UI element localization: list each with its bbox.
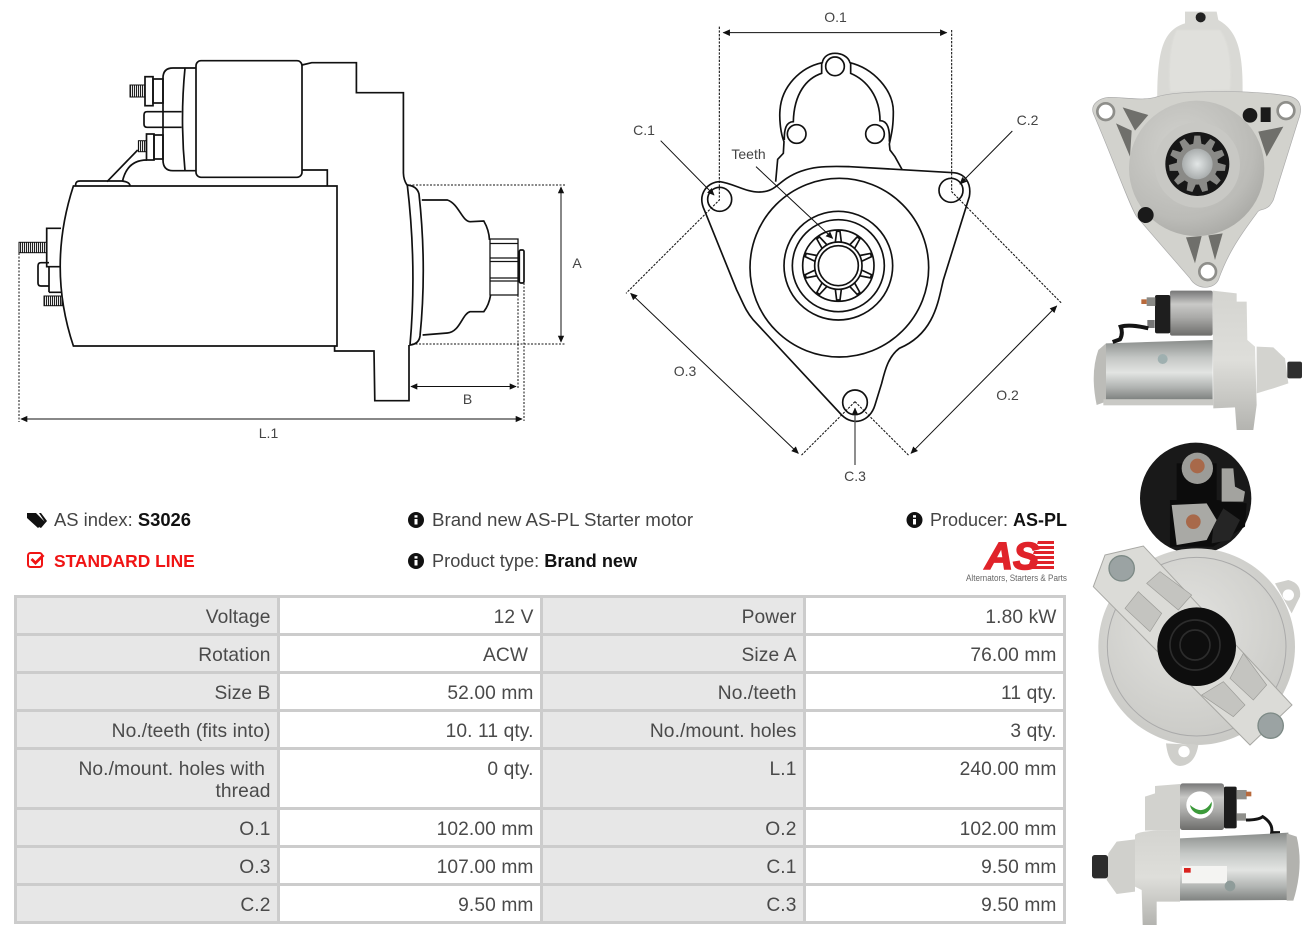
specification table: 9.50 mm [981, 895, 1056, 916]
specification table: Size B [214, 683, 270, 704]
icon: tags [27, 513, 47, 528]
specification table: O.2 [765, 819, 796, 840]
dimension B [411, 295, 518, 388]
logo stripes [1027, 541, 1054, 569]
solenoid [1180, 783, 1224, 830]
specification table: L.1 [770, 759, 796, 780]
specification table: C.1 [766, 857, 796, 878]
label B: B [463, 391, 472, 407]
dimension O.3 arrow [631, 293, 798, 453]
specification table: No./teeth [718, 683, 796, 704]
label O.3: O.3 [674, 363, 696, 379]
AS index: AS index: S3026 [54, 509, 191, 530]
specification table: 76.00 mm [970, 645, 1056, 666]
label Teeth: Teeth [731, 146, 766, 162]
specification table: Rotation [198, 645, 270, 666]
logo tagline: Alternators, Starters & Parts [966, 573, 1067, 583]
label O.1: O.1 [824, 9, 847, 25]
bracket recesses [1125, 572, 1267, 717]
icon: check box [28, 553, 44, 567]
specification table: 102.00 mm [960, 819, 1056, 840]
pinion teeth [805, 231, 872, 300]
motor cylinder [1106, 340, 1213, 399]
solenoid cover [1157, 12, 1243, 98]
end cap [1287, 833, 1300, 901]
housing disc [1098, 548, 1295, 745]
solenoid mount inner rim [784, 63, 889, 142]
specification table: O.1 [239, 819, 270, 840]
rear end bracket and bolts [19, 228, 62, 306]
specification table: No./mount. holes with [78, 759, 265, 780]
dotted construction lines [626, 27, 1062, 456]
pinion [1092, 855, 1108, 878]
side-view technical drawing of the starter motor [19, 61, 524, 401]
label L.1: L.1 [259, 425, 278, 441]
diagonal bracket [1093, 546, 1292, 745]
specification table: 11 qty. [1001, 683, 1056, 704]
specification table: 12 V [494, 607, 534, 628]
ear mounts [1166, 580, 1300, 766]
specification table: 0 qty. [487, 759, 534, 780]
specification table: 9.50 mm [458, 895, 534, 916]
lower terminal plate [1172, 503, 1217, 545]
specification table: thread [215, 781, 270, 802]
solenoid [1170, 291, 1213, 336]
motor cylinder [1180, 833, 1292, 901]
bolt [1158, 354, 1168, 364]
dimension O.2 arrow [911, 306, 1057, 453]
specification table: 10. 11 qty. [446, 721, 534, 742]
solenoid mount outline [776, 53, 902, 182]
nose [1257, 347, 1288, 393]
pinion tip [519, 250, 524, 283]
drive housing [1213, 291, 1257, 430]
connecting wires [107, 150, 147, 182]
dimension L.1 [19, 253, 524, 422]
photo: starter side view facing left [1092, 783, 1300, 925]
solenoid housing [196, 61, 302, 177]
standard line badge: STANDARD LINE [54, 551, 195, 571]
dimension A [409, 185, 566, 344]
solenoid black cap [1224, 787, 1237, 828]
logo letters: AS [984, 536, 1039, 578]
terminals and wire [1237, 790, 1280, 833]
specification table: 102.00 mm [437, 819, 534, 840]
lower terminal bolt [138, 134, 163, 160]
mounting holes on solenoid flange [787, 57, 884, 143]
icon: info (brand new) [408, 512, 424, 528]
icon: info (product type) [408, 553, 424, 569]
product type: Product type: Brand new [432, 551, 637, 571]
specification table: 107.00 mm [437, 857, 534, 878]
product description: Brand new AS-PL Starter motor [432, 509, 693, 530]
label O.2: O.2 [996, 387, 1019, 403]
terminals [1141, 297, 1155, 328]
terminal bracket on motor [76, 181, 130, 186]
specification table: Size A [742, 645, 796, 666]
C.2 pointer [960, 131, 1012, 184]
pinion [1165, 132, 1229, 196]
photo: starter rear view [1093, 443, 1300, 766]
motor body outline [60, 186, 337, 346]
mounting plate outline [702, 166, 970, 421]
icon: info (producer) [906, 512, 922, 528]
mounting holes C.1 C.2 C.3 [708, 178, 963, 415]
green sticker [1186, 791, 1214, 819]
front-view technical drawing [626, 27, 1062, 465]
C.1 pointer [661, 141, 714, 195]
wire [1113, 326, 1148, 342]
side-view dimension lines [19, 185, 566, 422]
specification table: 3 qty. [1010, 721, 1056, 742]
specification table: Voltage [206, 607, 270, 628]
pinion [1287, 362, 1302, 378]
flange [407, 185, 423, 345]
end cap [1094, 343, 1106, 405]
specification table: 9.50 mm [981, 857, 1056, 878]
photo: starter front view [1093, 12, 1301, 287]
Teeth pointer [756, 167, 833, 238]
C.3 pointer [853, 408, 857, 465]
AS-PL logo [966, 536, 1067, 583]
black plugs [1138, 107, 1271, 223]
drive housing [1135, 830, 1180, 925]
mounting flange [1093, 92, 1301, 287]
specification table: No./mount. holes [650, 721, 796, 742]
dimension O.1 arrow [723, 31, 947, 34]
label A: A [572, 255, 582, 271]
label C.1: C.1 [633, 122, 655, 138]
specification table: No./teeth (fits into) [112, 721, 270, 742]
pinion gear [490, 239, 518, 295]
flange holes [1097, 102, 1294, 280]
photo: starter side view facing right [1094, 291, 1302, 430]
drive housing outline [302, 63, 409, 401]
housing disc [1129, 101, 1264, 236]
upper block [1145, 784, 1180, 831]
bracket bolts [1109, 556, 1283, 738]
nose [1107, 839, 1135, 894]
upper terminal bolt [130, 77, 163, 106]
specification table: ACW [483, 645, 528, 666]
nose housing [422, 200, 491, 335]
specification table [14, 595, 1066, 924]
solenoid terminal end [1140, 443, 1251, 554]
specification table: O.3 [239, 857, 270, 878]
specification table: C.3 [766, 895, 796, 916]
specification table: Power [742, 607, 796, 628]
black rubber hub [1157, 607, 1236, 686]
specification table: C.2 [240, 895, 270, 916]
specification table: 52.00 mm [447, 683, 534, 704]
solenoid end cap [163, 68, 196, 171]
concentric housing rings [750, 178, 929, 357]
side terminal [1222, 468, 1245, 502]
label C.2: C.2 [1017, 112, 1039, 128]
specification table: 240.00 mm [960, 759, 1056, 780]
middle tab [144, 112, 182, 127]
product label [1182, 866, 1227, 883]
flange vents [1116, 107, 1283, 263]
producer: Producer: AS-PL [930, 510, 1067, 530]
label C.3: C.3 [844, 468, 866, 484]
upper terminal nut [1182, 453, 1213, 484]
solenoid black cap [1155, 295, 1170, 333]
cable boot [1212, 508, 1240, 543]
specification table: 1.80 kW [985, 607, 1056, 628]
bolt on motor [1225, 881, 1235, 891]
